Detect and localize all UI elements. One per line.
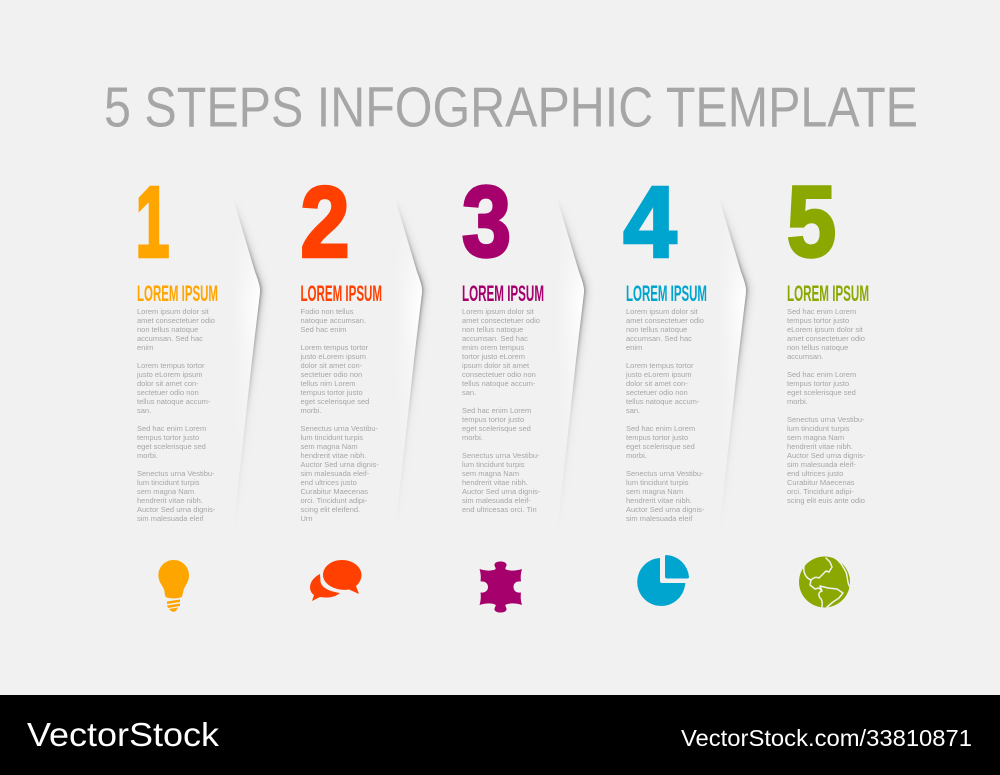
- text block 4: lum tincidunt turpis: [626, 478, 689, 487]
- text block 5: Auctor Sed urna dignis-: [787, 451, 866, 460]
- text block 5: amet consectetuer odio: [787, 334, 865, 343]
- text block 1: Senectus urna Vestibu-: [137, 469, 215, 478]
- text block 1: morbi.: [137, 451, 158, 460]
- text block 1: Sed hac enim Lorem: [137, 424, 206, 433]
- text block 3: sim malesuada eleif-: [462, 496, 531, 505]
- text block 3: end ultricesas orci. Tin: [462, 505, 537, 514]
- text block 4: non tellus natoque: [626, 325, 687, 334]
- text block 3: eget scelerisque sed: [462, 424, 531, 433]
- text block 3: Lorem ipsum dolor sit: [462, 307, 535, 316]
- text block 4: accumsan. Sed hac: [626, 334, 692, 343]
- text block 1: Lorem tempus tortor: [137, 361, 205, 370]
- chevron panel 2: [398, 206, 428, 479]
- footer logo: VectorStock: [27, 717, 219, 754]
- icon: light bulb: [158, 560, 189, 612]
- text block 3: san.: [462, 388, 476, 397]
- chevron panel 1: [236, 206, 266, 479]
- text block 4: sim malesuada eleif: [626, 514, 693, 523]
- text block 1: amet consectetuer odio: [137, 316, 215, 325]
- footer bar: [0, 695, 1000, 775]
- text block 1: lum tincidunt turpis: [137, 478, 200, 487]
- text block 4: tellus natoque accum-: [626, 397, 700, 406]
- heading 2: LOREM IPSUM: [300, 281, 382, 306]
- heading 1: LOREM IPSUM: [137, 281, 218, 306]
- number 1: 1: [136, 166, 170, 278]
- text block 3: Senectus urna Vestibu-: [462, 451, 540, 460]
- text block 3: sem magna Nam: [462, 469, 519, 478]
- text block 1: eget scelerisque sed: [137, 442, 206, 451]
- text block 5: Curabitur Maecenas: [787, 478, 855, 487]
- text block 1: tempus tortor justo: [137, 433, 199, 442]
- text block 1: sem magna Nam: [137, 487, 194, 496]
- text block 5: orci. Tincidunt adipi-: [787, 487, 854, 496]
- text block 2: Senectus urna Vestibu-: [300, 424, 379, 433]
- text block 3: consectetuer odio non: [462, 370, 536, 379]
- text block 5: sem magna Nam: [787, 433, 844, 442]
- heading 3: LOREM IPSUM: [462, 281, 544, 306]
- text block 4: justo eLorem ipsum: [625, 370, 691, 379]
- text block 4: Lorem ipsum dolor sit: [626, 307, 699, 316]
- text block 1: accumsan. Sed hac: [137, 334, 203, 343]
- text block 5: sim malesuada eleif-: [787, 460, 856, 469]
- icon: puzzle piece: [480, 562, 522, 612]
- text block 2: scing elit eleifend.: [300, 505, 360, 514]
- icon: globe: [799, 556, 850, 608]
- text block 2: tempus tortor justo: [300, 388, 363, 397]
- text block 2: sem magna Nam: [300, 442, 358, 451]
- text block 2: sectetuer odio non: [300, 370, 362, 379]
- text block 5: non tellus natoque: [787, 343, 848, 352]
- text block 5: Sed hac enim Lorem: [787, 370, 856, 379]
- text block 5: hendrerit vitae nibh.: [787, 442, 853, 451]
- chevron panel 4: [722, 206, 752, 479]
- number 5: 5: [787, 166, 836, 278]
- text block 2: end ultrices justo: [300, 478, 357, 487]
- text block 2: lum tincidunt turpis: [300, 433, 363, 442]
- text block 3: tellus natoque accum-: [462, 379, 536, 388]
- text block 5: Sed hac enim Lorem: [787, 307, 856, 316]
- text block 2: Curabitur Maecenas: [300, 487, 368, 496]
- step 3: [462, 166, 544, 612]
- text block 2: Sed hac enim: [300, 325, 346, 334]
- text block 3: morbi.: [462, 433, 483, 442]
- chevron panel 3: [560, 206, 590, 482]
- text block 4: Senectus urna Vestibu-: [626, 469, 704, 478]
- text block 3: amet consectetuer odio: [462, 316, 540, 325]
- text block 5: eLorem ipsum dolor sit: [787, 325, 864, 334]
- text block 2: sim malesuada eleif-: [300, 469, 370, 478]
- number 3: 3: [462, 166, 511, 278]
- text block 3: tempus tortor justo: [462, 415, 524, 424]
- text block 5: eget scelerisque sed: [787, 388, 856, 397]
- text block 2: Auctor Sed urna dignis-: [300, 460, 379, 469]
- icon: speech bubbles: [310, 560, 362, 601]
- text block 3: Sed hac enim Lorem: [462, 406, 531, 415]
- text block 1: justo eLorem ipsum: [136, 370, 202, 379]
- text block 3: ipsum dolor sit amet: [462, 361, 530, 370]
- text block 3: enim orem tempus: [462, 343, 524, 352]
- text block 1: enim: [137, 343, 153, 352]
- text block 2: hendrerit vitae nibh.: [300, 451, 366, 460]
- text block 1: sectetuer odio non: [137, 388, 199, 397]
- text block 3: lum tincidunt turpis: [462, 460, 525, 469]
- text block 5: Senectus urna Vestibu-: [787, 415, 865, 424]
- text block 5: morbi.: [787, 397, 808, 406]
- text block 1: hendrerit vitae nibh.: [137, 496, 203, 505]
- text block 4: san.: [626, 406, 640, 415]
- text block 2: tellus nim Lorem: [300, 379, 356, 388]
- icon: pie chart: [637, 555, 689, 606]
- text block 3: accumsan. Sed hac: [462, 334, 528, 343]
- text block 4: morbi.: [626, 451, 647, 460]
- text block 3: Auctor Sed urna dignis-: [462, 487, 541, 496]
- text block 1: tellus natoque accum-: [137, 397, 211, 406]
- text block 4: dolor sit amet con-: [626, 379, 688, 388]
- step 4: [624, 166, 707, 606]
- text block 5: end ultrices justo: [787, 469, 843, 478]
- text block 4: amet consectetuer odio: [626, 316, 704, 325]
- text block 5: lum tincidunt turpis: [787, 424, 850, 433]
- step 5: [787, 166, 869, 608]
- text block 2: Urn: [300, 514, 313, 523]
- text block 5: scing elit euis ante odio: [787, 496, 865, 505]
- step 1: [136, 166, 218, 612]
- text block 1: sim malesuada eleif: [137, 514, 204, 523]
- text block 2: Fodio non tellus: [300, 307, 354, 316]
- text block 5: accumsan.: [787, 352, 823, 361]
- text block 5: tempus tortor justo: [787, 316, 849, 325]
- text block 2: dolor sit amet con-: [300, 361, 363, 370]
- text block 4: Sed hac enim Lorem: [626, 424, 695, 433]
- text block 1: Auctor Sed urna dignis-: [137, 505, 216, 514]
- text block 1: Lorem ipsum dolor sit: [137, 307, 210, 316]
- text block 2: natoque accumsan.: [300, 316, 366, 325]
- text block 4: hendrerit vitae nibh.: [626, 496, 692, 505]
- number 4: 4: [624, 166, 677, 278]
- heading 4: LOREM IPSUM: [626, 281, 707, 306]
- text block 2: Lorem tempus tortor: [300, 343, 369, 352]
- text block 3: non tellus natoque: [462, 325, 523, 334]
- text block 3: hendrerit vitae nibh.: [462, 478, 528, 487]
- text block 2: justo eLorem ipsum: [300, 352, 366, 361]
- text block 1: non tellus natoque: [137, 325, 198, 334]
- text block 4: tempus tortor justo: [626, 433, 688, 442]
- text block 4: eget scelerisque sed: [626, 442, 695, 451]
- text block 4: Lorem tempus tortor: [626, 361, 694, 370]
- text block 4: enim: [626, 343, 642, 352]
- step 2: [300, 166, 382, 601]
- text block 4: sectetuer odio non: [626, 388, 688, 397]
- text block 4: Auctor Sed urna dignis-: [626, 505, 705, 514]
- text block 1: dolor sit amet con-: [137, 379, 199, 388]
- text block 1: san.: [137, 406, 151, 415]
- heading 5: LOREM IPSUM: [787, 281, 869, 306]
- text block 5: tempus tortor justo: [787, 379, 849, 388]
- text block 2: orci. Tincidunt adipi-: [300, 496, 368, 505]
- text block 2: eget scelerisque sed: [300, 397, 369, 406]
- text block 3: tortor justo eLorem: [462, 352, 525, 361]
- footer url: VectorStock.com/33810871: [681, 725, 972, 751]
- text block 4: sem magna Nam: [626, 487, 683, 496]
- text block 2: morbi.: [300, 406, 321, 415]
- number 2: 2: [300, 166, 350, 278]
